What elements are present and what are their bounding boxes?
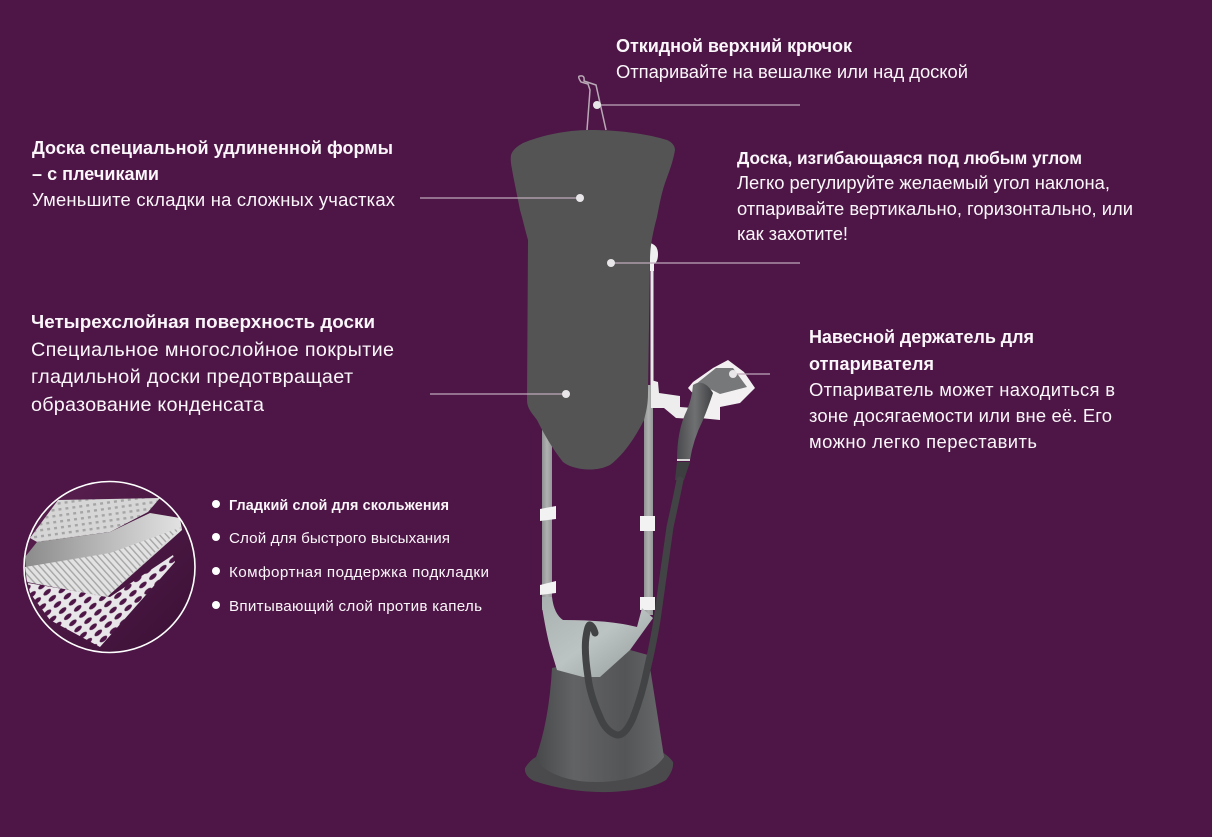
poles	[540, 385, 655, 615]
callout: board shape: – с плечиками	[32, 164, 159, 184]
callout: top hook: Откидной верхний крючок	[616, 36, 853, 56]
cable	[585, 480, 680, 735]
callout: four-layer surface	[31, 311, 570, 416]
bottom mesh layer	[28, 555, 175, 647]
callout: four-layer surface: гладильной доски предотвращает	[31, 366, 353, 388]
board hinge	[650, 243, 658, 271]
callout: steamer holder: можно легко переставить	[809, 431, 1037, 452]
yoke	[542, 597, 653, 677]
layers circle	[24, 482, 195, 652]
steamer head	[675, 360, 755, 480]
layer list: Слой для быстрого высыхания	[229, 530, 450, 547]
middle layer	[25, 513, 182, 597]
base body	[535, 650, 664, 782]
callout: steamer holder	[729, 327, 1115, 452]
callout: top hook	[593, 36, 968, 109]
callout: adjustable angle: отпаривайте вертикально, горизонтально, или	[737, 198, 1133, 219]
base foot	[525, 752, 673, 792]
callout: top hook: Отпаривайте на вешалке или над доской	[616, 61, 968, 82]
top mesh layer	[30, 498, 160, 542]
callout: board shape	[32, 138, 584, 210]
handle	[677, 383, 713, 460]
layer list: Комфортная поддержка подкладки	[229, 564, 489, 581]
callout: adjustable angle: Легко регулируйте желаемый угол наклона,	[737, 172, 1110, 193]
right pole upper	[650, 250, 654, 385]
callout: steamer holder: отпаривателя	[809, 354, 934, 374]
callout: four-layer surface: Четырехслойная поверхность доски	[31, 311, 375, 332]
callout: steamer holder: зоне досягаемости или вне её. Его	[809, 405, 1112, 426]
callout: four-layer surface: образование конденсата	[31, 394, 264, 416]
layer list	[212, 498, 489, 615]
callout: board shape: Доска специальной удлиненной формы	[32, 138, 393, 158]
callout: board shape: Уменьшите складки на сложных участках	[32, 189, 395, 210]
callout: steamer holder: Отпариватель может находиться в	[809, 379, 1115, 400]
layer list: Гладкий слой для скольжения	[229, 498, 449, 514]
holder bracket	[651, 380, 693, 419]
callout: adjustable angle: Доска, изгибающаяся под любым углом	[737, 148, 1082, 168]
callout: steamer holder: Навесной держатель для	[809, 327, 1034, 347]
callout: adjustable angle	[607, 148, 1133, 267]
icon: top hook	[579, 76, 606, 130]
layer list: Впитывающий слой против капель	[229, 598, 482, 615]
board	[511, 130, 675, 470]
steamer product	[511, 76, 755, 792]
pole clips	[540, 506, 655, 610]
callout: adjustable angle: как захотите!	[737, 223, 848, 244]
callout: four-layer surface: Специальное многослойное покрытие	[31, 339, 394, 361]
